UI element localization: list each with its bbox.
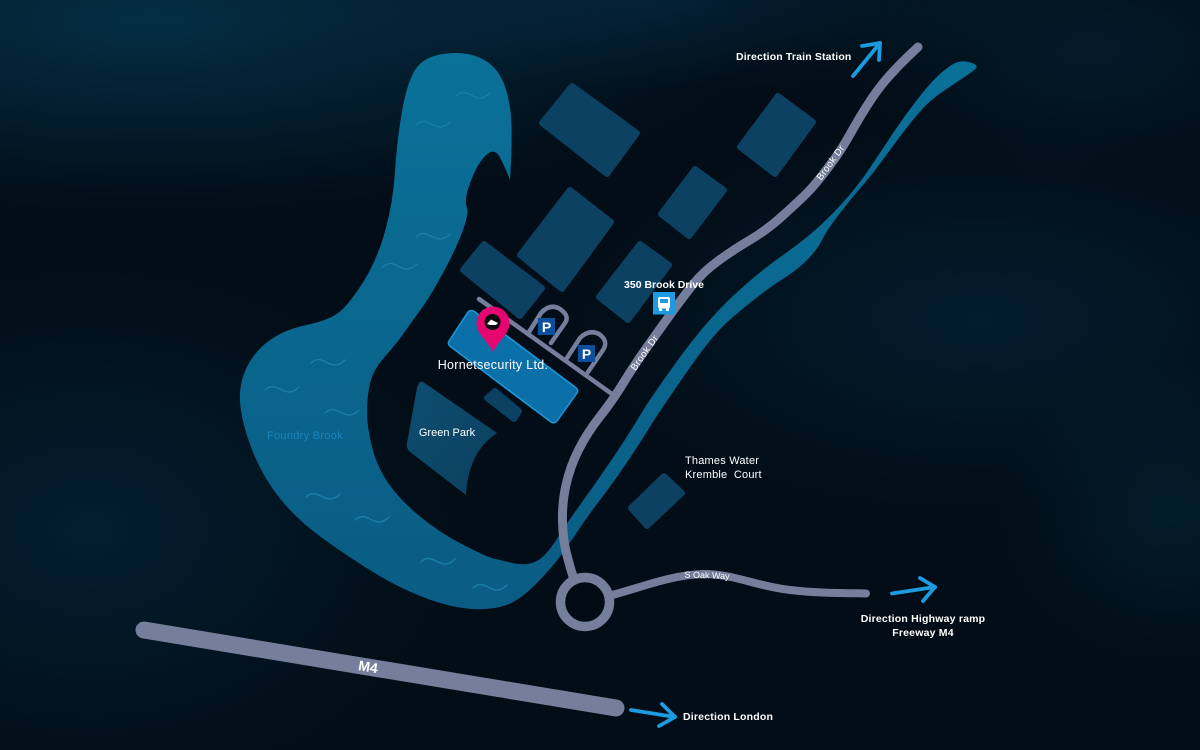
arrow: highway ramp bbox=[892, 578, 935, 601]
icon: location pin bbox=[476, 306, 510, 352]
road label: S Oak Way: S Oak Way bbox=[684, 570, 730, 581]
road label: M4: M4 bbox=[357, 657, 379, 676]
green park bbox=[407, 382, 497, 495]
icon: parking bbox=[578, 345, 595, 362]
road: S Oak Way bbox=[612, 574, 866, 595]
icon: parking: P bbox=[582, 346, 591, 362]
label: Green Park: Green Park bbox=[419, 427, 476, 439]
arrow: London bbox=[631, 704, 675, 726]
label: Foundry Brook: Foundry Brook bbox=[267, 430, 343, 442]
main building bbox=[448, 310, 578, 423]
icon: bus stop bbox=[653, 292, 675, 314]
icon: parking bbox=[538, 318, 555, 335]
label: Thames Water Kremble Court: Kremble Court bbox=[685, 469, 762, 481]
arrow: train station bbox=[853, 43, 880, 76]
buildings bbox=[463, 86, 813, 526]
icon: parking: P bbox=[542, 319, 551, 335]
road label: Brook Dr lower: Brook Dr bbox=[629, 333, 661, 373]
label: Thames Water Kremble Court: Thames Water bbox=[685, 455, 759, 467]
lake: Foundry Brook bbox=[240, 53, 977, 609]
road label: Brook Dr upper: Brook Dr bbox=[815, 143, 847, 183]
label: Direction Highway ramp Freeway M4: Direction Highway ramp bbox=[861, 613, 985, 625]
road: M4 bbox=[144, 630, 616, 708]
roundabout bbox=[560, 578, 610, 626]
label: Direction London: Direction London bbox=[683, 711, 773, 723]
label: Direction Train Station: Direction Train Station bbox=[736, 51, 851, 63]
parking road and bays bbox=[479, 299, 612, 394]
label: Hornetsecurity Ltd.: Hornetsecurity Ltd. bbox=[438, 358, 548, 372]
water ripples bbox=[265, 93, 507, 590]
road: Brook Drive bbox=[562, 47, 918, 580]
label: Direction Highway ramp Freeway M4: Freeway M4 bbox=[892, 627, 954, 639]
label: 350 Brook Drive: 350 Brook Drive bbox=[624, 279, 704, 291]
